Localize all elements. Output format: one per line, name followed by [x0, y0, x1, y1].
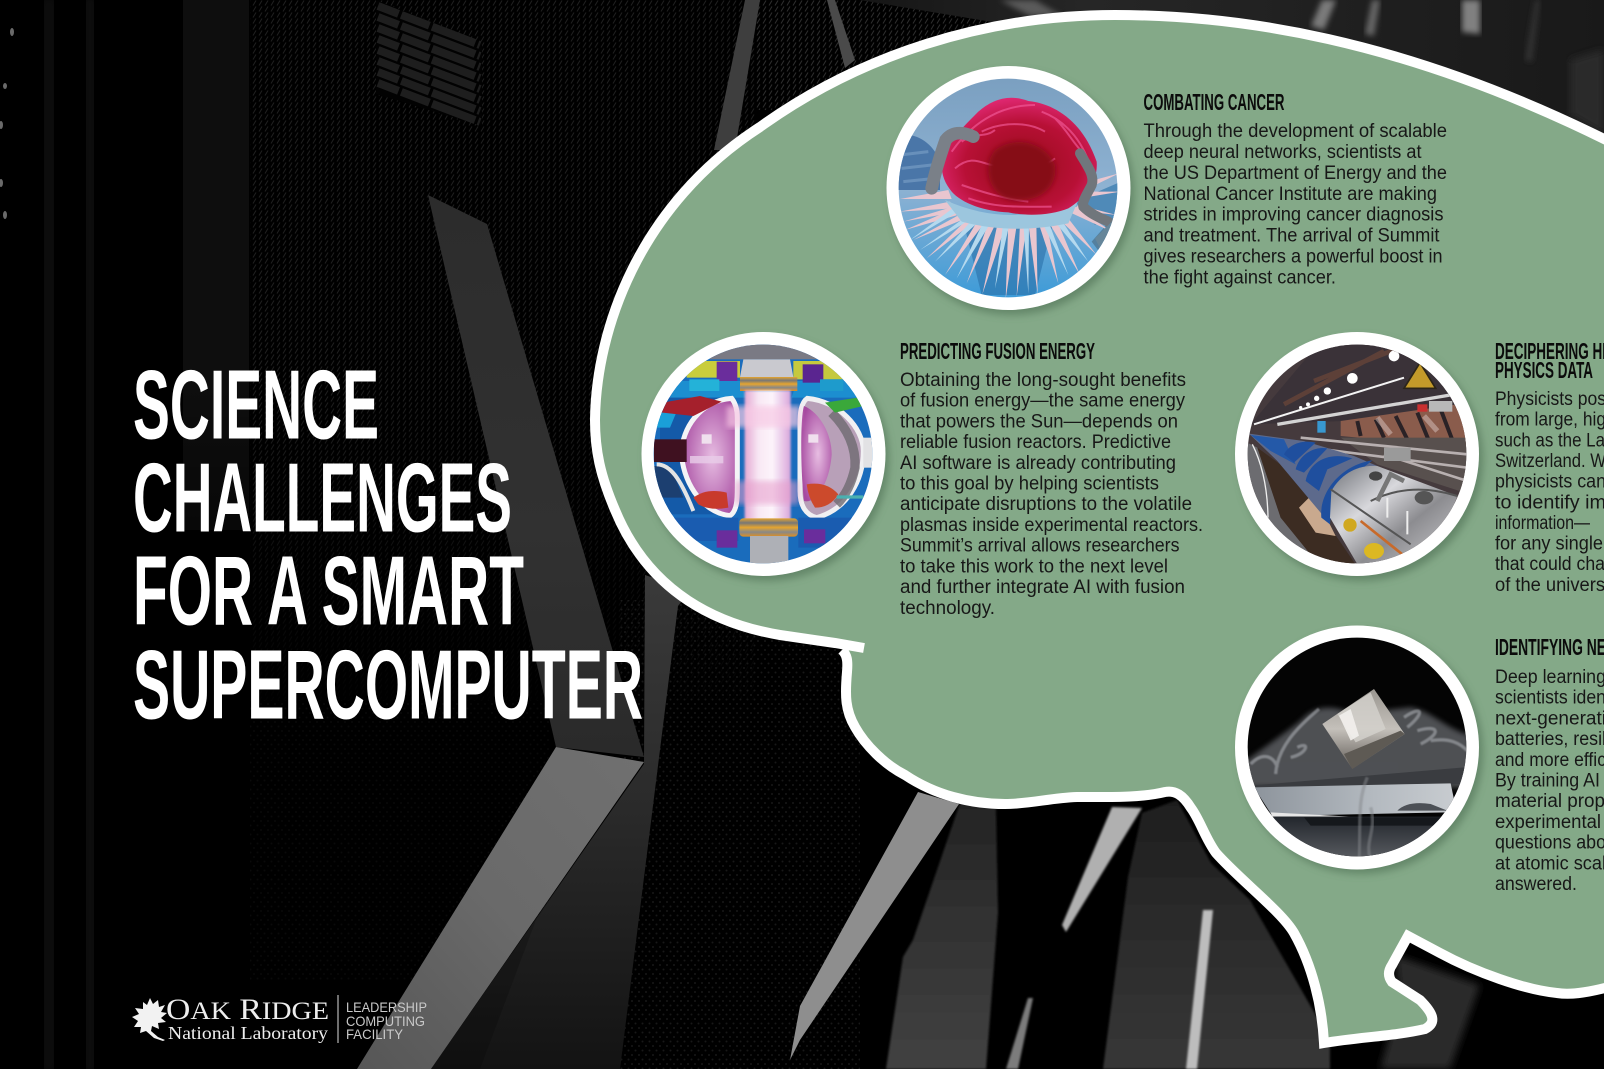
wordmark [166, 993, 329, 1043]
body text: to this goal by helping scientists [900, 474, 1159, 494]
body text: and further integrate AI with fusion [900, 577, 1185, 598]
heading: COMBATING CANCER [1144, 89, 1285, 115]
left edge specks [0, 28, 14, 219]
body text [1495, 667, 1604, 895]
title: FOR A SMART [133, 536, 524, 646]
logo: Oak Ridge National Laboratory / Leadership Computing Facility [132, 993, 427, 1043]
body text [1144, 121, 1447, 288]
body text: experimental [1495, 812, 1601, 833]
body text: strides in improving cancer diagnosis [1144, 205, 1444, 226]
wordmark: OAK RIDGE [166, 993, 329, 1026]
body text: gives researchers a powerful boost in [1144, 246, 1442, 267]
cube [1322, 689, 1405, 769]
right vessel [800, 398, 863, 518]
body text [900, 370, 1203, 619]
chevron lower arm [357, 747, 644, 1069]
body text: anticipate disruptions to the volatile [900, 494, 1192, 515]
body text: Obtaining the long-sought benefits [900, 370, 1186, 391]
image: tokamak reactor cross-section [650, 341, 876, 567]
magnets [1250, 434, 1377, 514]
heading [1495, 338, 1604, 383]
body text: AI software is already contributing [900, 453, 1176, 474]
body text: answered. [1495, 874, 1577, 895]
heading: PREDICTING FUSION ENERGY [900, 338, 1095, 364]
title: CHALLENGES [133, 442, 512, 552]
facility name: LEADERSHIP [346, 999, 427, 1015]
icon: oak leaf [132, 998, 167, 1041]
chevron upper arm [428, 195, 644, 757]
body text: National Cancer Institute are making [1144, 184, 1437, 205]
body text: to identify im [1495, 492, 1604, 513]
body text: By training AI [1495, 770, 1600, 792]
body text: Summit’s arrival allows researchers [900, 536, 1180, 557]
body text: and treatment. The arrival of Summit [1144, 226, 1440, 246]
body text [1495, 389, 1604, 596]
facility name: FACILITY [346, 1026, 404, 1042]
body text: technology. [900, 598, 995, 619]
body text: Through the development of scalable [1144, 121, 1447, 142]
panel: combating cancer [886, 66, 1447, 315]
body text: the US Department of Energy and the [1144, 163, 1447, 184]
title [133, 350, 643, 740]
panel: identifying new materials [1235, 626, 1604, 895]
facility name [346, 999, 427, 1042]
body text: material prop [1495, 791, 1604, 812]
wordmark: National Laboratory [168, 1023, 328, 1043]
panel: predicting fusion energy [642, 332, 1203, 619]
plasma column [745, 390, 791, 520]
facility name: COMPUTING [346, 1013, 425, 1029]
panel: green speech bubble [595, 15, 1604, 1043]
body text: reliable fusion reactors. Predictive [900, 432, 1171, 453]
image: cancer cell [895, 75, 1121, 301]
image: particle accelerator tunnel [1244, 341, 1470, 567]
body text: to take this work to the next level [900, 556, 1168, 577]
title: SUPERCOMPUTER [133, 630, 643, 740]
lower right panels [886, 803, 998, 1069]
plate [1254, 783, 1456, 816]
body text: of fusion energy—the same energy [900, 391, 1185, 412]
image: metal sample in cold vapour [1244, 634, 1470, 860]
panel: deciphering high-energy physics data [1235, 332, 1604, 596]
title: SCIENCE [133, 350, 379, 460]
body text: that powers the Sun—depends on [900, 411, 1178, 432]
body text: next-generati [1495, 708, 1604, 729]
left vessel [682, 398, 737, 516]
body text: deep neural networks, scientists at [1144, 142, 1422, 163]
IBM logo on cabinet [376, 0, 482, 126]
floor [1248, 443, 1308, 552]
body text: the fight against cancer. [1144, 267, 1336, 288]
body text: plasmas inside experimental reactors. [900, 515, 1203, 536]
panel shape below the chevron [431, 575, 690, 1069]
